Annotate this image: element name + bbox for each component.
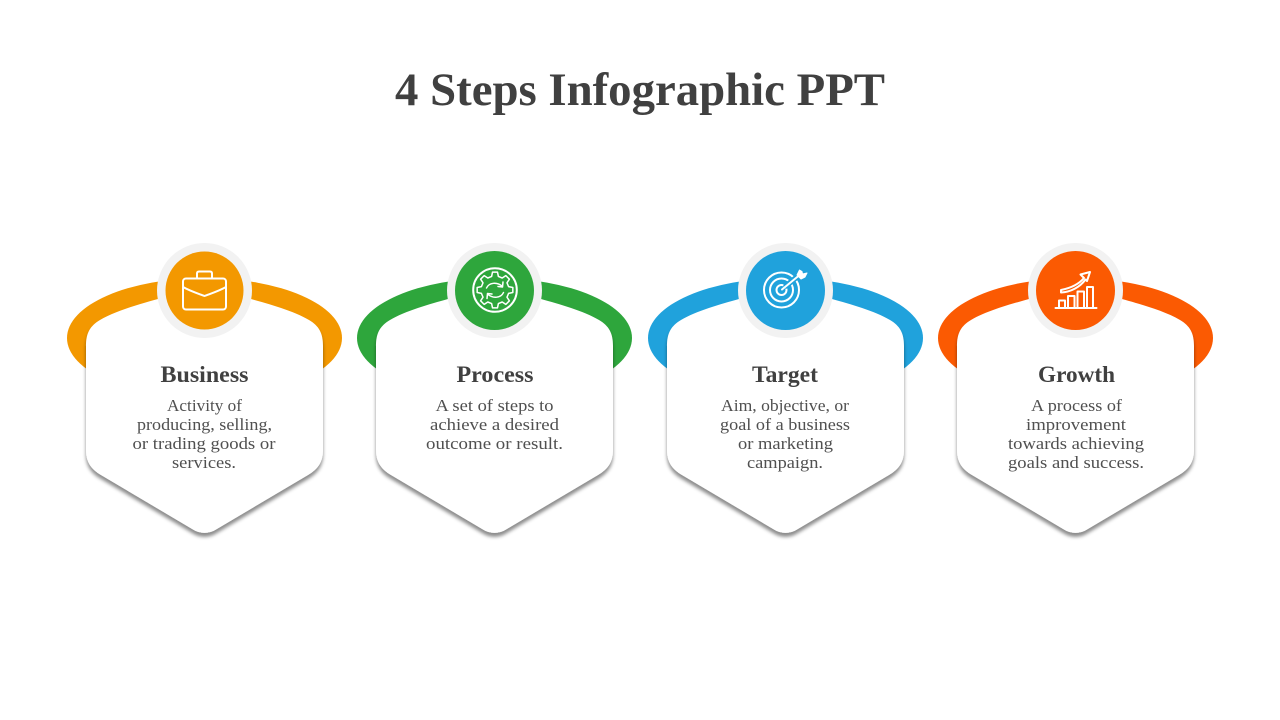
heading: growth: Growth xyxy=(1038,362,1115,387)
text: process description xyxy=(426,396,563,453)
text: process description: A set of steps to xyxy=(436,396,554,415)
ring: process xyxy=(357,278,632,398)
card: business xyxy=(86,290,323,533)
text: target description xyxy=(720,396,850,472)
card: growth xyxy=(957,290,1194,533)
icon badge: target xyxy=(738,243,833,338)
panel: target xyxy=(648,243,923,533)
panel: growth xyxy=(938,243,1213,533)
text: process description: outcome or result. xyxy=(426,434,563,453)
panel: business xyxy=(67,243,342,533)
text: target description: campaign. xyxy=(747,453,823,472)
text: business description: or trading goods or xyxy=(132,434,276,453)
text: target description: or marketing xyxy=(738,434,834,453)
text: business description xyxy=(132,396,276,472)
title: 4 Steps Infographic PPT xyxy=(395,64,885,116)
ring: business xyxy=(67,278,342,398)
text: process description: achieve a desired xyxy=(430,415,560,434)
text: business description: services. xyxy=(172,453,236,472)
text: growth description: towards achieving xyxy=(1008,434,1145,453)
card: process xyxy=(376,290,613,533)
text: business description: producing, selling, xyxy=(137,415,272,434)
heading: business: Business xyxy=(160,362,249,387)
text: target description: goal of a business xyxy=(720,415,850,434)
ring: growth xyxy=(938,278,1213,398)
heading: target: Target xyxy=(752,362,818,387)
text: growth description: A process of xyxy=(1031,396,1122,415)
text: business description: Activity of xyxy=(167,396,242,415)
text: growth description xyxy=(1008,396,1145,472)
card: target xyxy=(667,290,904,533)
text: growth description: improvement xyxy=(1026,415,1126,434)
text: growth description: goals and success. xyxy=(1008,453,1144,472)
icon badge: gear xyxy=(447,243,542,338)
ring: target xyxy=(648,278,923,398)
heading: process: Process xyxy=(456,362,534,387)
icon badge: growth chart xyxy=(1028,243,1123,338)
text: target description: Aim, objective, or xyxy=(721,396,849,415)
panel: process xyxy=(357,243,632,533)
icon badge: briefcase xyxy=(157,243,252,338)
